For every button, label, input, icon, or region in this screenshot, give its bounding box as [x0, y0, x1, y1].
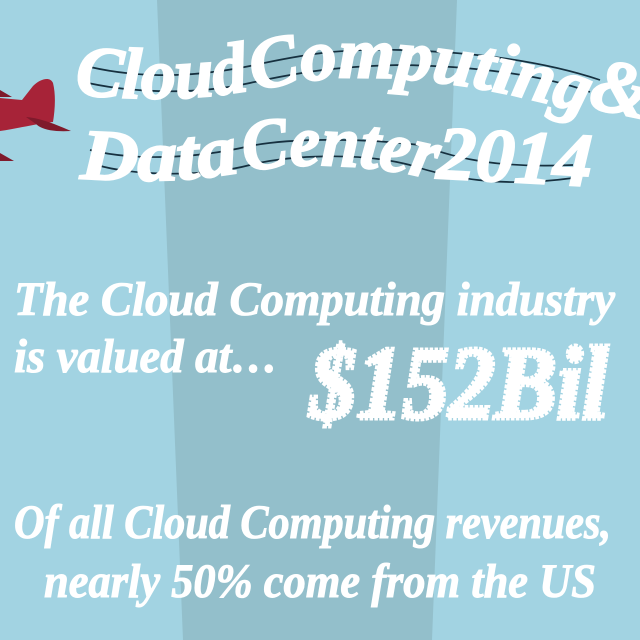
title: Cloud: [78, 40, 246, 100]
title: Center: [244, 118, 443, 177]
title: 2014: [434, 111, 594, 203]
text: US share: nearly 50% come from the US: [44, 555, 596, 608]
icon: red airplane: [0, 79, 71, 161]
text: US share: [14, 496, 611, 608]
text: industry value: is valued at…: [14, 330, 278, 383]
text: industry value: [14, 273, 616, 383]
title: Data: [78, 130, 237, 182]
center band: [157, 0, 457, 640]
text: industry value: The Cloud Computing industry: [14, 273, 616, 326]
big number: $152Bil: [308, 326, 608, 441]
banner strings: [88, 50, 600, 182]
title: Computing: [251, 34, 594, 124]
title: [78, 34, 640, 203]
